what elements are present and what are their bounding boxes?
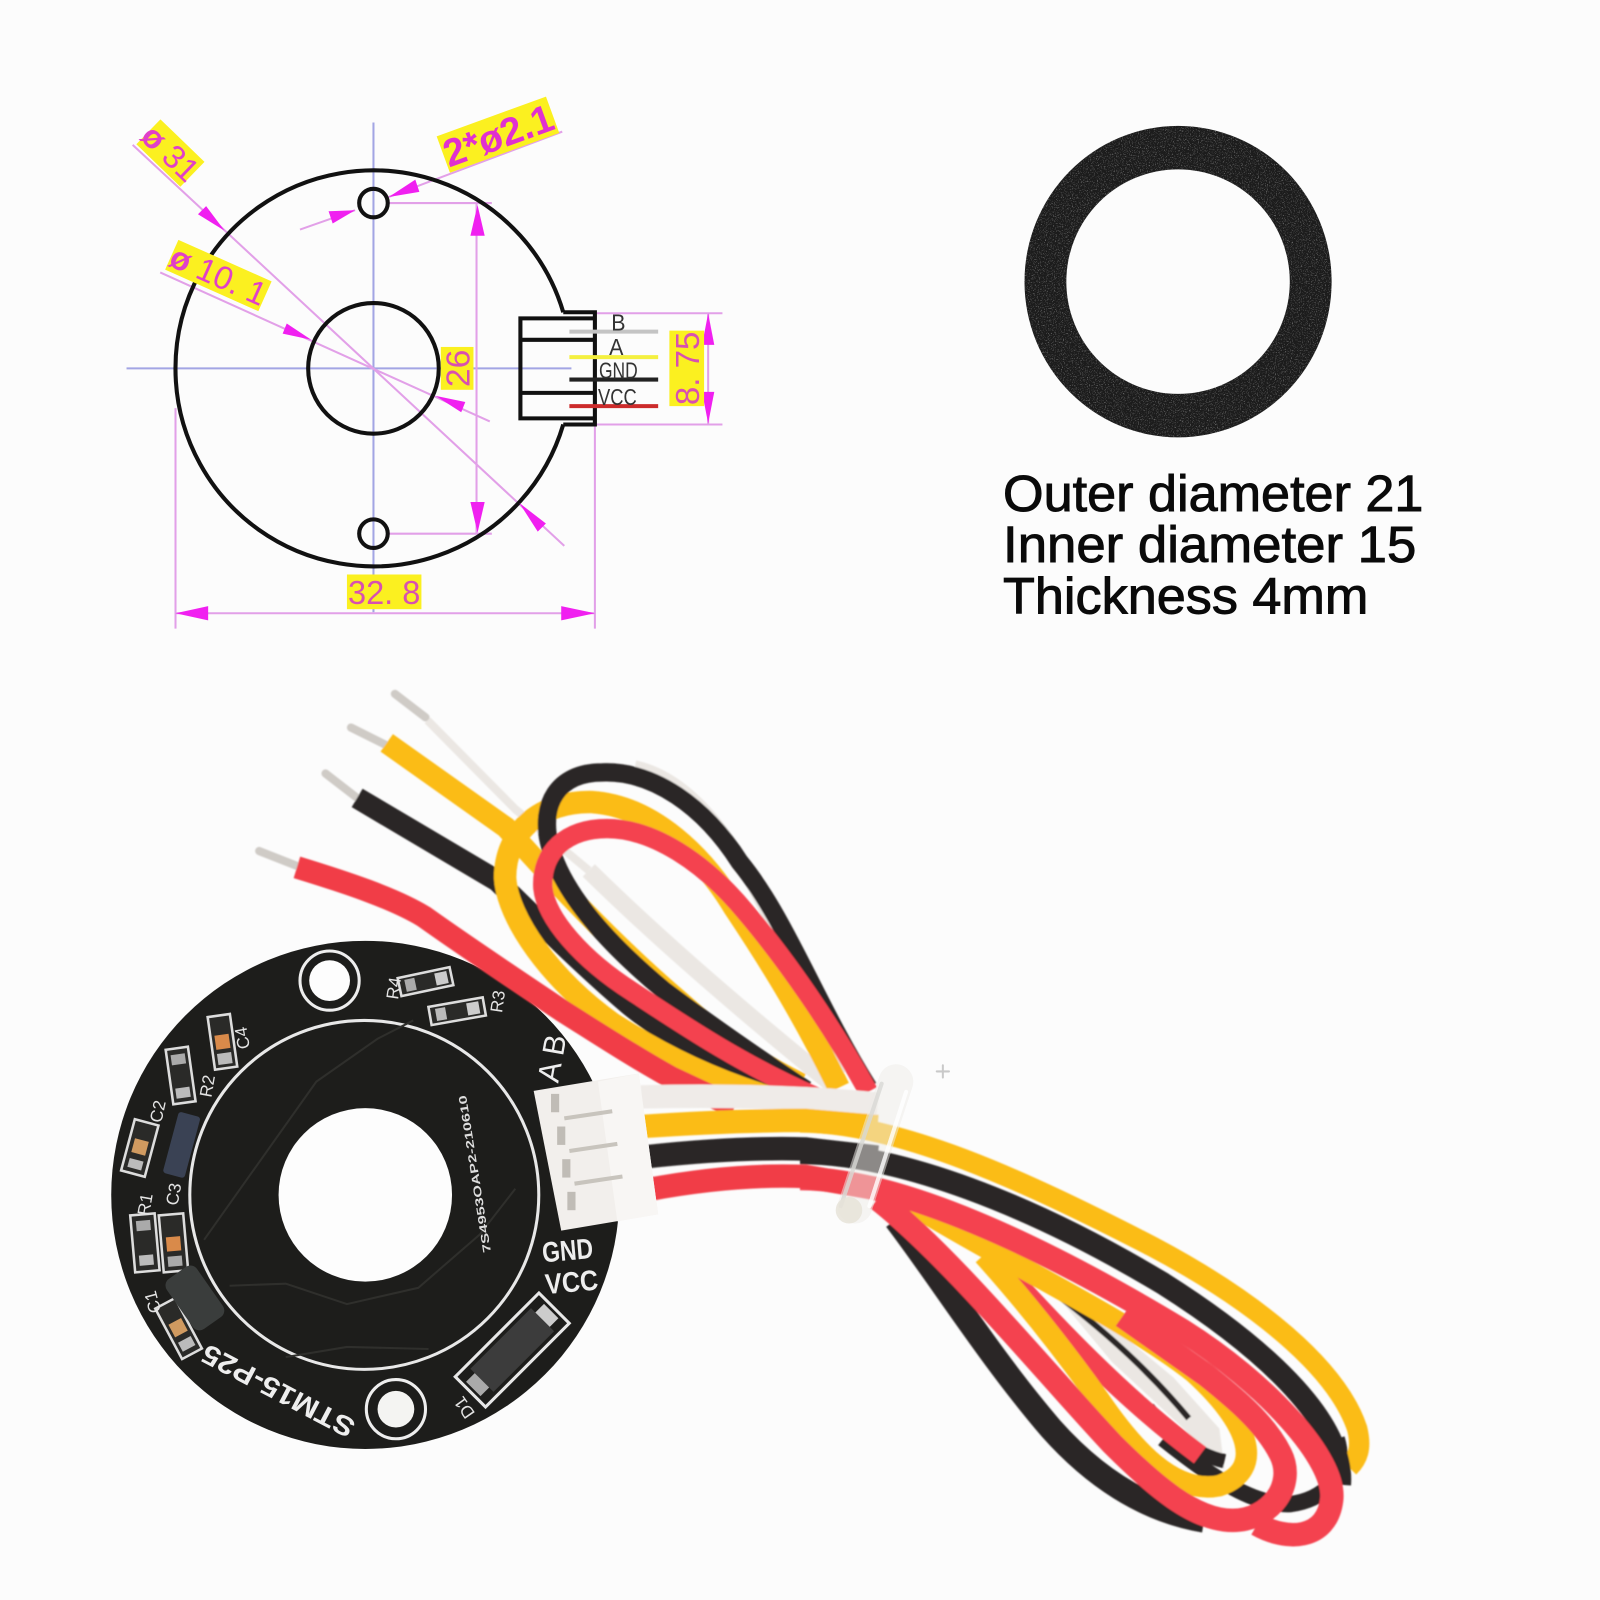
component labels: R1 <box>133 1192 157 1217</box>
board body <box>111 941 619 1449</box>
component labels: C1 <box>140 1289 165 1315</box>
connector outline <box>520 312 595 424</box>
icon: foam gasket ring <box>1024 126 1332 437</box>
connector housing <box>534 1073 658 1231</box>
label: diameter 10.1: ø 10. 1 <box>165 238 272 313</box>
component labels: R4 <box>382 975 405 1001</box>
pin labels: VCC <box>598 384 637 410</box>
board outline <box>175 170 563 566</box>
label: 32.8: 32. 8 <box>348 575 420 612</box>
black loop <box>547 772 868 1090</box>
pin labels: A <box>609 334 624 360</box>
gasket specification text: Thickness 4mm <box>1003 567 1368 624</box>
label: 8.75: 8. 75 <box>670 332 707 405</box>
back of lower bundle: black loop <box>896 1219 1204 1520</box>
center hole <box>279 1108 452 1282</box>
inner red <box>1000 1265 1200 1455</box>
lower red loop <box>878 1199 1285 1520</box>
mounting holes <box>300 951 426 1439</box>
component labels: C2 <box>146 1098 170 1124</box>
gasket specification text <box>1003 465 1423 624</box>
board name: STM15-P25 <box>196 1338 360 1444</box>
traces <box>204 1020 515 1357</box>
connector body <box>534 1073 658 1231</box>
label: 26: 26 <box>440 350 477 387</box>
outer yellow wire <box>800 1122 1359 1467</box>
dimension drawing <box>127 96 722 629</box>
white wire <box>428 720 847 1084</box>
upper red wire <box>800 1179 1332 1535</box>
component labels <box>133 975 509 1422</box>
pin labels GND VCC: GND <box>541 1233 594 1269</box>
black tail <box>357 798 776 1084</box>
pin labels: B <box>611 310 626 336</box>
inner white wedge <box>1061 1301 1224 1469</box>
wire harness <box>259 694 1359 1535</box>
red loop <box>543 829 868 1097</box>
gasket specification text: Outer diameter 21 <box>1003 465 1423 522</box>
outer black wire <box>800 1153 1340 1485</box>
serial number: 7S4953OAP2-210610 <box>457 1094 494 1253</box>
component labels: R2 <box>195 1073 219 1099</box>
component labels: D1 <box>450 1393 479 1422</box>
extension and dimension lines <box>133 132 722 629</box>
silk ring <box>190 1020 539 1369</box>
pin labels: GND <box>599 358 638 384</box>
stripped wire tips <box>259 694 426 866</box>
arrows <box>176 180 714 620</box>
SMD parts <box>121 967 486 1359</box>
circuit board <box>111 941 619 1449</box>
gasket specification text: Inner diameter 15 <box>1003 516 1416 573</box>
red tail <box>297 867 735 1107</box>
back loop parts <box>1163 1439 1340 1504</box>
bundle wires from connector <box>641 1096 878 1190</box>
component labels: C4 <box>230 1025 254 1051</box>
component labels: R3 <box>486 989 509 1014</box>
inner black wire <box>1148 1408 1224 1461</box>
label: hole diameter: 2*ø2.1 <box>438 97 560 176</box>
connector pins <box>564 1111 622 1184</box>
connector collar shade <box>598 1073 658 1221</box>
inner thin black edge <box>929 1209 1189 1418</box>
yellow tail <box>387 743 801 1084</box>
pin lines <box>569 332 658 406</box>
center lines <box>127 122 571 612</box>
clear cable tie <box>836 1065 949 1223</box>
dark IC package <box>163 1111 201 1178</box>
label: diameter 31: ø 31 <box>134 117 207 189</box>
pin labels AB: A B <box>532 1032 573 1085</box>
pin labels <box>598 310 638 410</box>
pin labels GND VCC <box>541 1233 599 1301</box>
pin labels GND VCC: VCC <box>544 1265 599 1301</box>
diode D1 <box>455 1293 569 1407</box>
component labels: C3 <box>162 1182 185 1207</box>
lower yellow loop <box>898 1196 1246 1487</box>
capacitor package <box>162 1262 228 1334</box>
yellow loop <box>505 802 839 1102</box>
